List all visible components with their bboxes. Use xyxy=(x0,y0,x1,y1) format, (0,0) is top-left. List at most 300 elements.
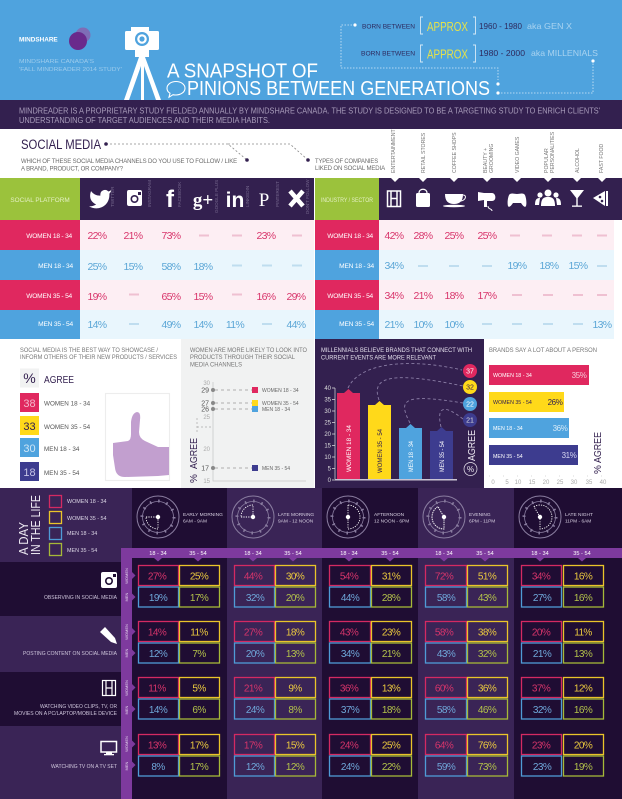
panel: women more likely chart xyxy=(181,339,314,488)
company types question: TYPES OF COMPANIES xyxy=(315,158,379,165)
social platform question: A BRAND, PRODUCT, OR COMPANY? xyxy=(21,166,123,172)
row: men 18-34: 15% xyxy=(569,260,588,272)
clock: afternoon xyxy=(327,496,409,538)
clock: late night: 11PM - 6AM xyxy=(565,518,591,524)
row: men 35-54: 21% xyxy=(385,319,404,331)
row: women 18-34 xyxy=(0,220,314,250)
row: men 18-34: 58% xyxy=(162,261,181,273)
icon: shopping bag xyxy=(416,189,430,207)
platform names: DON'T FOLLOW xyxy=(305,179,310,214)
data grid: watching tv: 17% xyxy=(190,740,209,752)
bar: women 18-34: 35% xyxy=(572,371,587,380)
row: men 35-54 xyxy=(0,310,314,339)
stat: women 35-54 xyxy=(20,416,91,435)
value: men 35-54 xyxy=(201,465,290,472)
row: women 35-54: 17% xyxy=(478,290,497,302)
rail labels and markers: WOMEN xyxy=(124,624,129,640)
millennials line: APPROX xyxy=(427,48,469,62)
value badges: 32 xyxy=(466,384,474,392)
axis xyxy=(324,386,457,484)
header panel xyxy=(0,0,622,101)
dashed connectors xyxy=(348,364,463,427)
platform names: LINKEDIN xyxy=(245,186,250,207)
rail labels and markers: MEN xyxy=(124,761,129,770)
row label: posting content: POSTING CONTENT ON SOCIAL MEDIA xyxy=(23,651,117,657)
clock: early morning: 6AM - 9AM xyxy=(183,518,207,524)
data grid: observing in social media: 31% xyxy=(382,572,401,582)
value: women 35-54 xyxy=(201,400,299,408)
industry column labels: BEAUTY + xyxy=(483,148,489,173)
axis: 30 xyxy=(324,409,332,415)
data grid: watching tv: 23% xyxy=(533,762,552,773)
company types question xyxy=(315,158,386,172)
data grid: watching video: 18% xyxy=(382,705,401,716)
icon: linkedin: in xyxy=(226,189,244,212)
age band and side rail: 35 - 54 xyxy=(573,551,591,557)
axis title xyxy=(464,430,478,476)
data grid: watching video: 14% xyxy=(149,705,168,716)
social platform question xyxy=(21,158,238,172)
legend: MEN 35 - 54 xyxy=(67,548,97,554)
bar: women 18-34: WOMEN 18 - 34 xyxy=(346,425,353,472)
value axis: 10 xyxy=(515,480,522,486)
data grid: watching tv xyxy=(138,734,604,776)
data grid: watching video: 8% xyxy=(288,705,302,716)
row label: watching tv: WATCHING TV ON A TV SET xyxy=(51,764,117,770)
generation X line xyxy=(362,17,572,34)
data grid: watching tv: 25% xyxy=(382,740,401,752)
bar: men 18-34: MEN 18 - 34 xyxy=(408,441,415,472)
value: women 18-34 xyxy=(201,387,299,394)
logo: Mindshare xyxy=(19,28,90,50)
industry column labels: RETAIL STORES xyxy=(421,132,427,173)
dot chart axes: 20 xyxy=(203,447,211,453)
value: men 18-34: 26 xyxy=(201,406,209,414)
data grid: watching video xyxy=(138,678,604,719)
data grid: posting content: 58% xyxy=(435,628,454,638)
row: women 35-54: 16% xyxy=(257,291,276,303)
data grid: watching video: 37% xyxy=(341,705,360,716)
value: men 18-34 xyxy=(201,406,290,414)
title: PINIONS BETWEEN GENERATIONS xyxy=(187,78,490,100)
icon: camera on tripod xyxy=(124,27,161,100)
age band and side rail: 35 - 54 xyxy=(381,551,399,557)
data grid: watching video: 58% xyxy=(437,705,456,716)
data grid: posting content: 13% xyxy=(286,649,305,660)
data grid: watching tv: 64% xyxy=(435,740,454,752)
stat: men 35-54: MEN 35 - 54 xyxy=(44,470,80,477)
rail labels and markers: MEN xyxy=(124,592,129,601)
data grid: watching tv: 15% xyxy=(286,740,305,752)
row: men 18-34: 25% xyxy=(88,261,107,273)
clock: afternoon: AFTERNOON xyxy=(374,512,405,518)
data grid: watching video: 5% xyxy=(192,684,206,694)
data grid: posting content: 20% xyxy=(532,628,551,638)
icon: hair dryer xyxy=(478,192,495,211)
heading: a day in the life: IN THE LIFE xyxy=(28,495,43,555)
value axis: 0 xyxy=(491,480,495,486)
value axis xyxy=(489,476,607,486)
chart heading xyxy=(190,347,307,368)
row: men 18-34: 15% xyxy=(124,261,143,273)
study credit: 'FALL MINDREADER 2014 STUDY' xyxy=(19,67,122,73)
panel: a day in the life background xyxy=(0,488,622,799)
value: men 35-54: MEN 35 - 54 xyxy=(262,466,290,472)
chart heading: MILLENNIALS BELIEVE BRANDS THAT CONNECT WITH xyxy=(321,347,472,354)
data grid: watching tv: 17% xyxy=(190,762,209,773)
data grid: watching tv: 12% xyxy=(246,762,265,773)
row: women 35-54: 18% xyxy=(445,290,464,302)
data grid: watching tv: 17% xyxy=(244,740,263,752)
row: women 18-34: 25% xyxy=(478,230,497,242)
bar: women 35-54 xyxy=(368,401,391,479)
bar: men 35-54: 31% xyxy=(562,451,577,460)
clock: late morning xyxy=(232,496,314,538)
stat: women 35-54: 33 xyxy=(23,421,36,433)
row: women 18-34: 22% xyxy=(88,230,107,242)
data grid: observing in social media: 44% xyxy=(244,572,263,582)
data grid: observing in social media: 72% xyxy=(435,572,454,582)
clock: late morning: LATE MORNING xyxy=(278,512,314,518)
data grid: watching tv: 12% xyxy=(286,762,305,773)
data grid: watching tv: 24% xyxy=(340,740,359,752)
axis title xyxy=(593,432,604,474)
study credit: MINDSHARE CANADA'S xyxy=(19,59,94,65)
axis title: AGREE xyxy=(189,438,200,469)
data grid: posting content: 11% xyxy=(574,628,592,638)
data grid: observing in social media: 44% xyxy=(341,593,360,604)
legend xyxy=(50,496,107,556)
stat: women 18-34 xyxy=(20,393,91,412)
row label: observing in social media: OBSERVING IN SOCIAL MEDIA xyxy=(44,595,117,601)
value axis: 40 xyxy=(600,480,607,486)
clock: evening: EVENING xyxy=(469,512,491,518)
company types question: LIKED ON SOCIAL MEDIA xyxy=(315,165,386,172)
row: men 35-54: 14% xyxy=(194,319,213,331)
icon: speech bubble letter O xyxy=(167,82,185,97)
icon: coffee cup xyxy=(443,194,465,207)
icon: do not follow cross xyxy=(290,191,303,206)
axis title: AGREE xyxy=(467,430,478,461)
bar: women 35-54: 26% xyxy=(548,398,563,407)
data grid: watching video: 46% xyxy=(478,705,497,716)
icon: people xyxy=(535,190,561,206)
title: A SNAPSHOT OF xyxy=(167,60,318,82)
row: men 18-34 xyxy=(315,250,614,280)
bar: men 35-54: MEN 35 - 54 xyxy=(439,441,446,472)
row: men 35-54: MEN 35 - 54 xyxy=(339,321,375,328)
data grid: posting content: 27% xyxy=(244,628,263,638)
stat: men 35-54 xyxy=(20,462,80,481)
row label: watching tv xyxy=(51,742,117,770)
clock: evening xyxy=(423,496,495,538)
icon: thumbs up xyxy=(106,394,170,480)
data grid: watching tv: 73% xyxy=(478,762,497,773)
data grid: posting content: 13% xyxy=(574,649,593,660)
platform names: TWITTER xyxy=(110,186,115,207)
data grid: observing in social media: 58% xyxy=(437,593,456,604)
industry table rows xyxy=(315,220,614,339)
axis: 15 xyxy=(324,444,332,450)
industry column labels: COFFEE SHOPS xyxy=(452,132,458,173)
stat: men 18-34 xyxy=(20,438,80,457)
icon: pencil xyxy=(100,627,117,644)
study credit xyxy=(19,59,122,73)
industry column labels: ALCOHOL xyxy=(575,148,581,173)
data grid: posting content xyxy=(138,622,604,663)
value: women 18-34: WOMEN 18 - 34 xyxy=(262,388,299,394)
bar: men 18-34 xyxy=(399,424,422,479)
row: men 18-34: MEN 18 - 34 xyxy=(38,263,74,270)
row: women 18-34: WOMEN 18 - 34 xyxy=(327,233,374,240)
data grid: posting content: 32% xyxy=(478,649,497,660)
data grid: watching video: 32% xyxy=(533,705,552,716)
row: women 18-34: 28% xyxy=(414,230,433,242)
chart heading: WOMEN ARE MORE LIKELY TO LOOK INTO xyxy=(190,347,307,354)
row: women 18-34: 42% xyxy=(385,230,404,242)
axis: 20 xyxy=(324,432,332,438)
age band and side rail: 18 - 34 xyxy=(435,551,453,557)
value axis: 20 xyxy=(543,480,550,486)
data grid: watching tv: 23% xyxy=(532,740,551,752)
row: men 35-54: 49% xyxy=(162,319,181,331)
data grid: posting content: 23% xyxy=(382,628,401,638)
clock: evening: 6PM - 11PM xyxy=(469,518,495,524)
rail labels and markers: WOMEN xyxy=(124,736,129,752)
intro text band xyxy=(0,100,622,129)
data grid: posting content: 38% xyxy=(478,628,497,638)
table header: industries xyxy=(315,178,622,220)
platform names xyxy=(110,179,310,214)
age band and side rail: 35 - 54 xyxy=(189,551,207,557)
row: women 18-34: 21% xyxy=(124,230,143,242)
percent agree key: AGREE xyxy=(44,374,74,386)
chart heading: CURRENT EVENTS ARE MORE RELEVANT xyxy=(321,354,436,362)
data grid: watching video: 24% xyxy=(246,705,265,716)
axis: 10 xyxy=(324,455,332,461)
data grid: posting content: 21% xyxy=(533,649,552,660)
data grid: observing in social media: 16% xyxy=(574,593,593,604)
row label: watching video: WATCHING VIDEO CLIPS, TV, OR xyxy=(40,704,117,710)
icon: google plus: g+ xyxy=(193,190,213,211)
data grid: watching tv: 76% xyxy=(478,740,497,752)
table header: social platforms xyxy=(0,178,314,220)
value: women 18-34: 29 xyxy=(201,388,209,394)
intro text band: UNDERSTANDING OF TARGET AUDIENCES AND THEIR MEDIA HABITS. xyxy=(19,116,270,125)
millennials line: 1980 - 2000 xyxy=(479,48,525,58)
industry column labels: GROOMING xyxy=(489,144,495,173)
axis title: % xyxy=(593,465,604,474)
data grid: watching tv: 8% xyxy=(151,762,165,773)
row: women 35-54 xyxy=(315,280,614,310)
data grid: posting content: 12% xyxy=(149,649,168,660)
industry column labels: FAST FOOD xyxy=(599,143,605,173)
dot chart axes: 30 xyxy=(203,381,211,387)
rail labels and markers: WOMEN xyxy=(124,680,129,696)
millennials line xyxy=(361,45,598,62)
icon: instagram xyxy=(127,190,142,206)
row: women 18-34: 23% xyxy=(257,230,276,242)
bar: women 18-34 xyxy=(489,365,589,385)
data grid: posting content: 43% xyxy=(437,649,456,660)
table header: social platforms: SOCIAL PLATFORM xyxy=(10,197,70,204)
row label: watching video xyxy=(14,680,117,717)
clock: late morning: 9AM - 12 NOON xyxy=(278,518,314,524)
rail labels and markers: MEN xyxy=(124,648,129,657)
clock: early morning: EARLY MORNING xyxy=(183,512,223,518)
data grid: observing in social media: 20% xyxy=(286,593,305,604)
row label: posting content xyxy=(23,627,117,657)
clock: late night xyxy=(519,496,593,538)
axis title: % xyxy=(189,474,200,483)
value axis: 5 xyxy=(505,480,509,486)
platform names: PINTEREST xyxy=(275,181,280,207)
millennials line: aka MILLENIALS xyxy=(531,48,598,58)
row: men 18-34: 18% xyxy=(194,261,213,273)
data grid: watching video: 21% xyxy=(244,684,263,694)
data grid: posting content: 21% xyxy=(382,649,401,660)
data grid: observing in social media: 19% xyxy=(149,593,168,604)
chart heading xyxy=(321,347,472,362)
rail labels and markers: MEN xyxy=(124,705,129,714)
row: women 35-54: 65% xyxy=(162,291,181,303)
industry column labels: PERSONALITIES xyxy=(550,131,556,173)
data grid: posting content: 34% xyxy=(341,649,360,660)
data grid: watching video: 11% xyxy=(148,684,166,694)
bar: men 18-34: MEN 18 - 34 xyxy=(493,426,523,432)
data grid: posting content: 18% xyxy=(286,628,305,638)
platform names: FACEBOOK xyxy=(177,181,182,207)
data grid: watching tv: 24% xyxy=(341,762,360,773)
bar: women 18-34 xyxy=(337,389,360,479)
data grid: watching tv: 22% xyxy=(382,762,401,773)
age band and side rail: 35 - 54 xyxy=(284,551,302,557)
data grid: observing in social media: 43% xyxy=(478,593,497,604)
icon: pizza slice xyxy=(593,191,608,206)
row: men 18-34: 18% xyxy=(540,260,559,272)
row: women 35-54: 19% xyxy=(88,291,107,303)
dot chart axes xyxy=(197,381,306,485)
dot chart axes: 15 xyxy=(203,479,211,485)
millennials line: BORN BETWEEN xyxy=(361,50,415,58)
data grid: watching video: 16% xyxy=(574,705,593,716)
data grid: watching tv: 19% xyxy=(574,762,593,773)
data grid: observing in social media: 30% xyxy=(286,572,305,582)
row: women 18-34 xyxy=(315,220,614,250)
axis: 35 xyxy=(324,398,332,404)
row: women 18-34: 25% xyxy=(445,230,464,242)
axis: 25 xyxy=(324,420,332,426)
legend: WOMEN 35 - 54 xyxy=(67,516,107,522)
value axis: 25 xyxy=(557,480,564,486)
value badges xyxy=(463,364,477,427)
platform names: INSTAGRAM xyxy=(147,180,152,207)
row: men 35-54 xyxy=(315,310,614,339)
rail labels and markers xyxy=(124,568,136,770)
table header: industries: INDUSTRY / SECTOR xyxy=(321,197,373,204)
value badges: 37 xyxy=(466,368,474,376)
row: women 35-54 xyxy=(0,280,314,310)
social media heading xyxy=(21,137,310,162)
data grid: posting content: 14% xyxy=(148,628,167,638)
chart heading: BRANDS SAY A LOT ABOUT A PERSON xyxy=(489,347,597,354)
row: men 35-54: MEN 35 - 54 xyxy=(38,321,74,328)
icon: film strip xyxy=(102,680,116,696)
stat: men 35-54: 18 xyxy=(23,467,36,479)
stat: men 18-34: MEN 18 - 34 xyxy=(44,446,80,453)
bar: women 35-54: WOMEN 35 - 54 xyxy=(377,429,384,473)
percent agree key: % xyxy=(23,370,36,386)
showcase heading xyxy=(20,347,178,361)
clock: late night: LATE NIGHT xyxy=(565,512,593,518)
heading: a day in the life xyxy=(16,495,43,555)
generation X line: 1960 - 1980 xyxy=(479,21,522,31)
connector lines xyxy=(341,25,593,93)
industry column labels: VIDEO GAMES xyxy=(515,136,521,173)
bar: women 35-54: WOMEN 35 - 54 xyxy=(493,400,532,406)
percent agree key xyxy=(20,368,74,388)
heading: a day in the life: A DAY xyxy=(16,522,31,555)
social media heading: SOCIAL MEDIA xyxy=(21,137,101,152)
data grid: watching tv: 13% xyxy=(148,740,167,752)
industry column labels: POPULAR xyxy=(544,148,550,173)
data grid: watching video: 60% xyxy=(435,684,454,694)
row: men 18-34 xyxy=(0,250,314,280)
axis title xyxy=(189,438,200,483)
panel: showcase agree xyxy=(20,347,178,481)
data grid: watching video: 36% xyxy=(340,684,359,694)
legend: MEN 18 - 34 xyxy=(67,531,97,537)
row label: observing in social media xyxy=(44,572,117,601)
data grid: observing in social media: 32% xyxy=(246,593,265,604)
row: women 35-54: 29% xyxy=(287,291,306,303)
value: men 35-54: 17 xyxy=(201,466,209,472)
row label: watching video: MOVIES ON A PC/LAPTOP/MOBILE DEVICE xyxy=(14,711,117,717)
age band and side rail: 18 - 34 xyxy=(340,551,358,557)
data grid: watching tv: 59% xyxy=(437,762,456,773)
stat: women 35-54: WOMEN 35 - 54 xyxy=(44,424,91,431)
row: women 35-54: WOMEN 35 - 54 xyxy=(327,293,374,300)
data grid: observing in social media: 28% xyxy=(382,593,401,604)
value badges: 21 xyxy=(466,418,474,424)
data grid: observing in social media: 51% xyxy=(478,572,497,582)
bar: women 35-54 xyxy=(489,392,564,412)
row: women 18-34: 73% xyxy=(162,230,181,242)
bar: men 18-34: 36% xyxy=(553,424,568,433)
row: women 35-54: WOMEN 35 - 54 xyxy=(26,293,73,300)
data grid: posting content: 11% xyxy=(190,628,208,638)
industry column labels: ENTERTAINMENT xyxy=(391,129,397,173)
data grid: observing in social media: 16% xyxy=(574,572,593,582)
data grid: watching video: 12% xyxy=(574,684,593,694)
age band and side rail xyxy=(121,548,622,799)
data grid: watching video: 9% xyxy=(288,684,302,694)
age band and side rail: 35 - 54 xyxy=(476,551,494,557)
bar: women 18-34: WOMEN 18 - 34 xyxy=(493,373,532,379)
data grid: observing in social media xyxy=(138,566,604,607)
icon: tv monitor xyxy=(101,742,116,755)
axis: 40 xyxy=(324,386,332,392)
data grid: watching video: 13% xyxy=(382,684,401,694)
icon: facebook: f xyxy=(166,186,175,213)
data grid: observing in social media: 25% xyxy=(190,572,209,582)
value axis: 15 xyxy=(529,480,536,486)
value badges: 22 xyxy=(466,402,474,408)
chart heading: PRODUCTS THROUGH THEIR SOCIAL xyxy=(190,354,295,361)
age band and side rail: 18 - 34 xyxy=(244,551,262,557)
row: men 18-34: 19% xyxy=(508,260,527,272)
data grid: watching tv: 20% xyxy=(574,740,593,752)
